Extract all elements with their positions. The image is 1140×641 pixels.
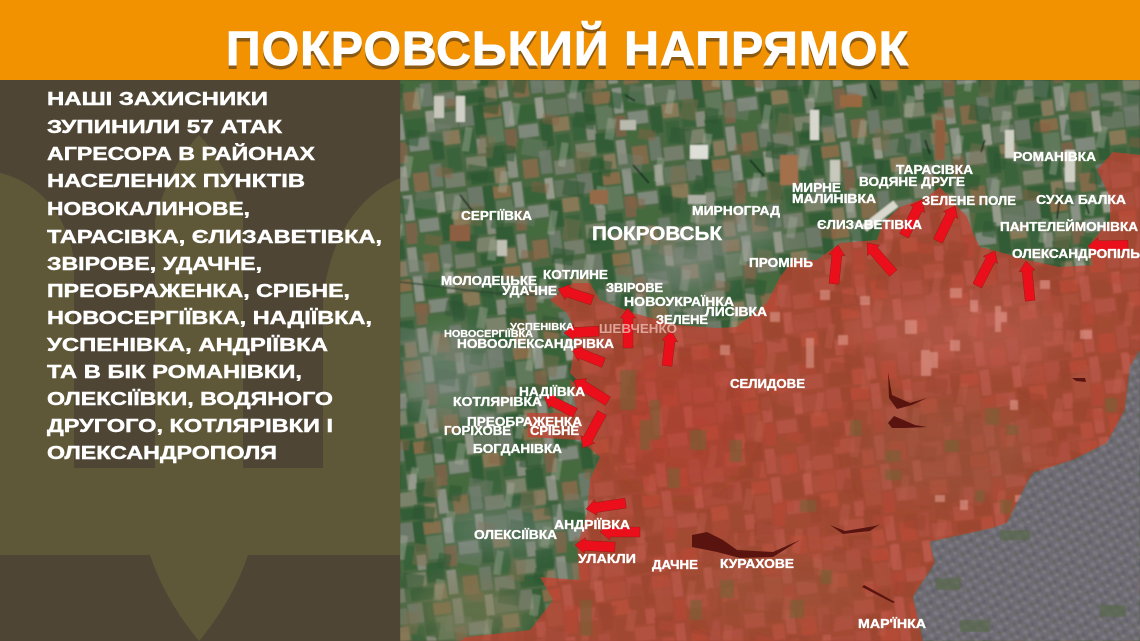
header bar bbox=[0, 0, 1140, 80]
text block: summary: УСПЕНІВКА, АНДРІЇВКА bbox=[47, 334, 328, 355]
text block: summary: ТА В БІК РОМАНІВКИ, bbox=[47, 361, 302, 382]
map labels bbox=[441, 150, 1140, 631]
panel: left text background bbox=[0, 80, 400, 641]
map labels: ПРЕОБРАЖЕНКА bbox=[467, 415, 582, 429]
text block: summary: ЗУПИНИЛИ 57 АТАК bbox=[47, 116, 283, 137]
map labels: ЗЕЛЕНЕ bbox=[656, 313, 708, 327]
map labels: УДАЧНЕ bbox=[502, 284, 557, 298]
green patches in urban area bbox=[935, 530, 1126, 632]
map labels: ПРОМІНЬ bbox=[749, 256, 813, 270]
text block: summary: НОВОКАЛИНОВЕ, bbox=[47, 198, 250, 219]
map labels: АНДРІЇВКА bbox=[554, 517, 630, 532]
arrow: Надіївка bbox=[570, 373, 612, 408]
text block: summary: ОЛЕКСІЇВКИ, ВОДЯНОГО bbox=[47, 388, 333, 409]
text block: summary: ПРЕОБРАЖЕНКА, СРІБНЕ, bbox=[47, 280, 350, 301]
map labels: ПОКРОВСЬК bbox=[592, 224, 722, 245]
map labels: НАДІЇВКА bbox=[519, 384, 585, 399]
arrow: Зелене Поле bbox=[931, 202, 962, 245]
map labels: ЗЕЛЕНЕ ПОЛЕ bbox=[922, 194, 1016, 208]
map labels: СЕЛИДОВЕ bbox=[730, 377, 805, 391]
map labels: КОТЛИНЕ bbox=[543, 268, 608, 282]
map labels: ЛИСІВКА bbox=[705, 305, 767, 319]
arrow: Андріївка north bbox=[585, 495, 627, 517]
map labels: СЕРГІЇВКА bbox=[461, 208, 532, 223]
arrow: Андріївка bbox=[600, 524, 640, 540]
map labels: КОТЛЯРІВКА bbox=[453, 395, 542, 409]
rivers and ponds north bbox=[400, 85, 1089, 295]
text block: summary: ОЛЕКСАНДРОПОЛЯ bbox=[47, 442, 277, 463]
text block: summary: НОВОСЕРГІЇВКА, НАДІЇВКА, bbox=[47, 307, 372, 328]
terrain: gray-toned settlements bbox=[402, 214, 785, 640]
map labels: ОЛЕКСАНДРОПІЛЬ bbox=[1012, 247, 1140, 261]
arrow: Єлизаветівка east bbox=[861, 238, 899, 278]
arrow: Тарасівка bbox=[897, 196, 929, 239]
map labels: ОЛЕКСІЇВКА bbox=[474, 527, 557, 542]
map labels: УСПЕНІВКА bbox=[510, 322, 574, 333]
map labels: КУРАХОВЕ bbox=[720, 557, 794, 571]
map labels: ПАНТЕЛЕЙМОНІВКА bbox=[1000, 219, 1138, 234]
arrow: Зелене bbox=[659, 330, 679, 367]
gray urban area bbox=[913, 350, 1140, 641]
arrow: Єлизаветівка west bbox=[826, 244, 846, 285]
terrain base bbox=[400, 80, 1140, 641]
fields inside occupied area bbox=[580, 280, 1117, 636]
panel: map bbox=[400, 80, 1140, 641]
map labels: ДАЧНЕ bbox=[652, 558, 698, 572]
map labels: РОМАНІВКА bbox=[1013, 150, 1096, 164]
title: ПОКРОВСЬКИЙ НАПРЯМОК bbox=[226, 21, 909, 76]
arrow: Улакли bbox=[575, 537, 615, 555]
map labels: НОВООЛЕКСАНДРІВКА bbox=[457, 337, 614, 351]
map labels: МИРНОГРАД bbox=[692, 204, 780, 218]
map labels: УЛАКЛИ bbox=[578, 552, 636, 566]
text block: summary: ТАРАСІВКА, ЄЛИЗАВЕТІВКА, bbox=[47, 226, 382, 247]
text block: summary: НАСЕЛЕНИХ ПУНКТІВ bbox=[47, 170, 305, 191]
map labels: МАЛИНІВКА bbox=[792, 192, 876, 206]
map labels: ВОДЯНЕ ДРУГЕ bbox=[859, 175, 965, 189]
map labels: МАР'ЇНКА bbox=[858, 616, 926, 631]
attack arrows bbox=[540, 196, 1128, 555]
text block: summary: ДРУГОГО, КОТЛЯРІВКИ І bbox=[47, 415, 333, 436]
red area tone bbox=[648, 294, 1062, 618]
arrow: Пантелеймонівка bbox=[970, 247, 1002, 289]
map labels: НОВОСЕРГІЇВКА bbox=[444, 327, 533, 340]
title: ПОКРОВСЬКИЙ НАПРЯМОК bbox=[226, 24, 909, 80]
map labels: ЄЛИЗАВЕТІВКА bbox=[817, 218, 922, 232]
text block: summary bbox=[47, 88, 382, 463]
map labels: ЗВІРОВЕ bbox=[606, 281, 663, 295]
terrain: light fields north bbox=[434, 95, 1075, 256]
arrow: Успенівка bbox=[564, 323, 599, 341]
map labels: МИРНЕ bbox=[792, 181, 841, 195]
map labels: ГОРІХОВЕ bbox=[444, 424, 511, 438]
map labels: ШЕВЧЕНКО bbox=[599, 322, 677, 336]
trident emblem bbox=[0, 135, 400, 641]
arrow: Новоолександрівка bbox=[569, 343, 607, 370]
arrow: Срібне bbox=[576, 409, 609, 452]
text block: summary: ЗВІРОВЕ, УДАЧНЕ, bbox=[47, 253, 262, 274]
map labels: БОГДАНІВКА bbox=[473, 442, 562, 456]
reservoirs and rivers south bbox=[692, 372, 1086, 603]
map labels: МОЛОДЕЦЬКЕ bbox=[441, 274, 537, 288]
arrow: Олександропіль bbox=[1018, 260, 1038, 302]
text block: summary: НАШІ ЗАХИСНИКИ bbox=[47, 88, 268, 109]
arrow: east edge bbox=[1088, 237, 1128, 254]
arrow: Удачне bbox=[556, 281, 595, 308]
occupied territory bbox=[460, 152, 1140, 641]
map labels: НОВОУКРАЇНКА bbox=[624, 294, 734, 309]
arrow: Звірове bbox=[620, 308, 636, 348]
map labels: СРІБНЕ bbox=[530, 424, 579, 438]
text block: summary: АГРЕСОРА В РАЙОНАХ bbox=[47, 143, 316, 164]
map labels: СУХА БАЛКА bbox=[1036, 193, 1126, 207]
map labels: ТАРАСІВКА bbox=[896, 163, 973, 177]
arrow: Котлярівка bbox=[540, 390, 579, 420]
